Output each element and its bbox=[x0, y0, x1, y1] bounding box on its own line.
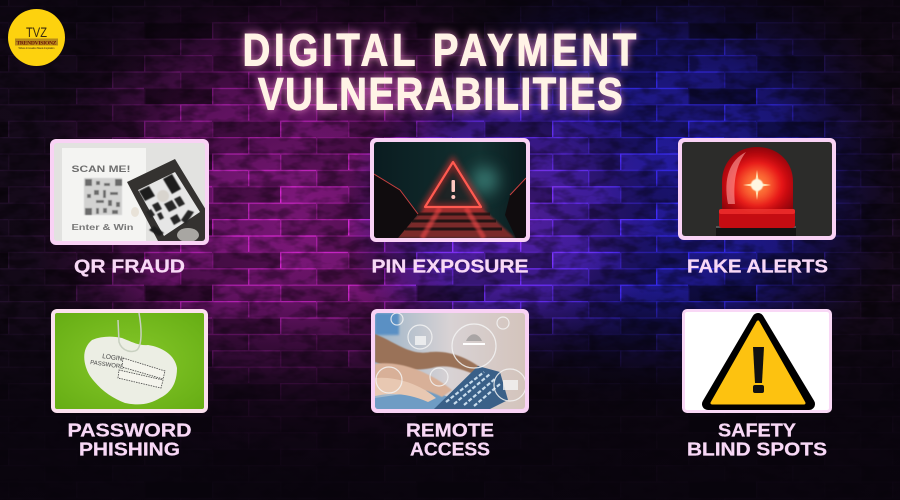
label: password phishing: PASSWORD bbox=[68, 420, 192, 440]
panel: fake alerts bbox=[678, 138, 836, 276]
image card: scan me QR poster bbox=[50, 139, 209, 245]
image card: login on a hook: PASSWORD bbox=[90, 360, 125, 371]
label: PIN exposure: PIN EXPOSURE bbox=[372, 256, 528, 276]
logo: TVZ Trendvisionz badge: Where Innovation Meets Inspiration bbox=[18, 46, 55, 50]
logo: TVZ Trendvisionz badge: TRENDVISIONZ bbox=[16, 40, 57, 46]
label: safety blind spots: SAFETY bbox=[718, 420, 797, 440]
image card: scan me QR poster: SCAN ME! bbox=[72, 164, 130, 175]
logo: TVZ Trendvisionz badge: TVZ bbox=[26, 24, 47, 40]
title: DIGITAL PAYMENT bbox=[243, 25, 637, 75]
image card: yellow warning triangle bbox=[682, 309, 832, 413]
panel: QR fraud bbox=[50, 139, 209, 276]
title: DIGITAL PAYMENT bbox=[243, 25, 637, 75]
image card: hands typing with security icons bbox=[371, 309, 529, 413]
label: remote access: ACCESS bbox=[410, 438, 490, 460]
title: VULNERABILITIES bbox=[258, 69, 623, 119]
label: password phishing: PHISHING bbox=[79, 438, 180, 460]
image card: red siren light bbox=[678, 138, 836, 240]
image card: red neon warning over keyboard bbox=[370, 138, 530, 242]
panel: safety blind spots bbox=[682, 309, 832, 460]
panel: remote access bbox=[371, 309, 529, 460]
image card: login on a hook: LOGIN bbox=[102, 353, 123, 363]
label: remote access: REMOTE bbox=[406, 420, 494, 440]
label: safety blind spots bbox=[687, 420, 827, 460]
title bbox=[243, 25, 637, 119]
label: fake alerts: FAKE ALERTS bbox=[687, 256, 828, 276]
label: password phishing bbox=[68, 420, 192, 460]
panel: PIN exposure bbox=[370, 138, 530, 276]
label: QR fraud: QR FRAUD bbox=[74, 256, 185, 276]
image card: login on a hook bbox=[51, 309, 208, 413]
image card: scan me QR poster: Enter & Win bbox=[72, 223, 134, 232]
title: VULNERABILITIES bbox=[258, 69, 623, 119]
logo: TVZ Trendvisionz badge bbox=[8, 9, 65, 66]
panel: password phishing bbox=[51, 309, 208, 460]
label: remote access bbox=[406, 420, 494, 460]
label: safety blind spots: BLIND SPOTS bbox=[687, 438, 827, 460]
